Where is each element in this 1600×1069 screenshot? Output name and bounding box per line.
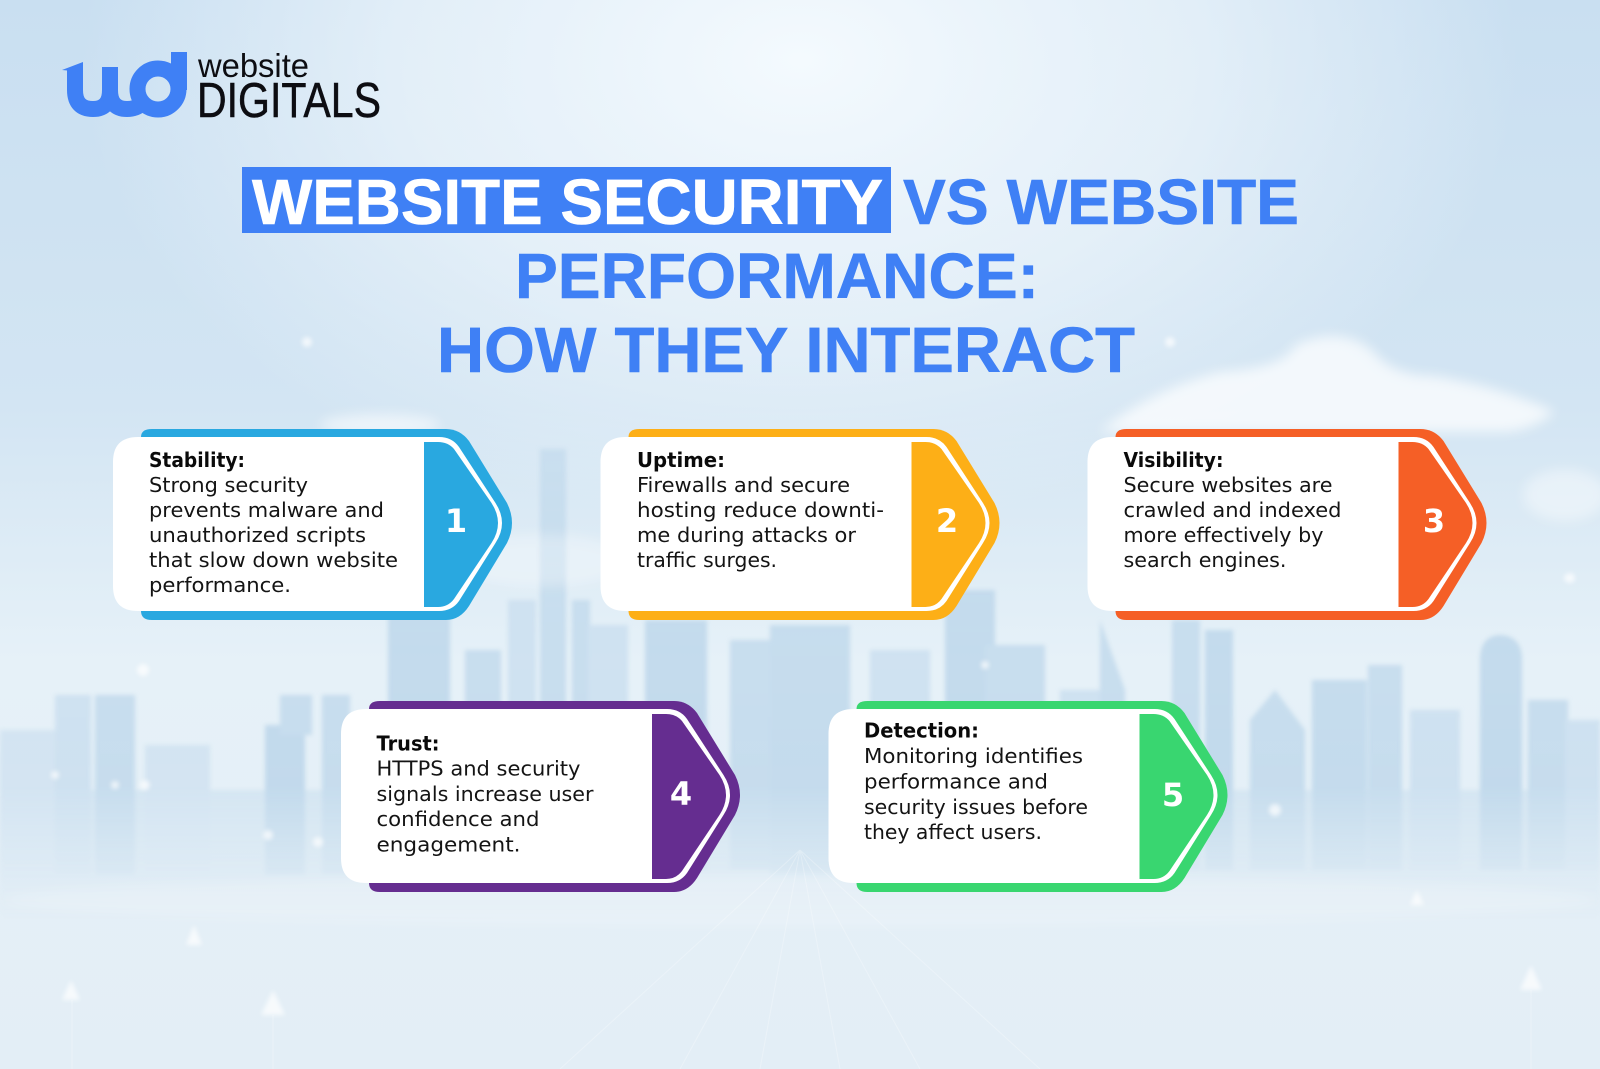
panel: trust card [341,701,740,892]
card text: engagement. [376,832,520,856]
card shape [113,429,512,620]
card text: they affect users. [864,820,1042,844]
card text: Stability: [149,448,245,472]
number 1: 1 [445,502,467,540]
card text: unauthorized scripts [149,523,366,547]
panel: stability card [113,429,512,620]
card text: signals increase user [376,782,594,806]
card shape [828,701,1228,892]
card text: confidence and [376,807,540,831]
panel: visibility card [1088,429,1486,620]
number 4: 4 [670,775,692,813]
card text: search engines. [1124,548,1286,572]
card shape [1088,429,1486,620]
panel: uptime card [600,429,1000,620]
card text [637,448,884,572]
card text: Firewalls and secure [637,473,850,497]
card text: Detection: [864,718,979,742]
card text: Uptime: [637,448,725,472]
card text: HTTPS and security [376,756,580,780]
card text: security issues before [864,795,1088,819]
card text: traffic surges. [637,548,777,572]
number 5: 5 [1162,776,1184,814]
logo wordmark [197,47,381,128]
card text: me during attacks or [637,523,857,547]
card text: performance. [149,573,291,597]
title [242,166,1299,386]
card text: that slow down website [149,548,398,572]
number 3: 3 [1423,502,1445,540]
card text: hosting reduce downti- [637,498,884,522]
card shape [600,429,1000,620]
card text: Visibility: [1124,448,1224,472]
card text [149,448,398,597]
title highlight [242,167,891,233]
card text: performance and [864,770,1048,794]
card text [376,732,594,856]
card text [1124,448,1342,572]
logo wordmark: DIGITALS [197,74,381,128]
card text: crawled and indexed [1124,498,1342,522]
logo wordmark: website [197,47,309,84]
icon: WD monogram [62,52,179,110]
card text: Secure websites are [1124,473,1332,497]
card text: Strong security [149,473,308,497]
title: PERFORMANCE: [515,240,1039,312]
title: VS WEBSITE [903,166,1299,238]
card text: prevents malware and [149,498,384,522]
title: WEBSITE SECURITY [252,166,883,238]
card shape [341,701,740,892]
logo [62,47,381,128]
card text: more effectively by [1124,523,1324,547]
card text: Monitoring identifies [864,744,1083,768]
title: HOW THEY INTERACT [437,314,1135,386]
number 2: 2 [936,502,958,540]
card text [864,718,1088,844]
panel: detection card [828,701,1228,892]
card text: Trust: [376,732,440,756]
